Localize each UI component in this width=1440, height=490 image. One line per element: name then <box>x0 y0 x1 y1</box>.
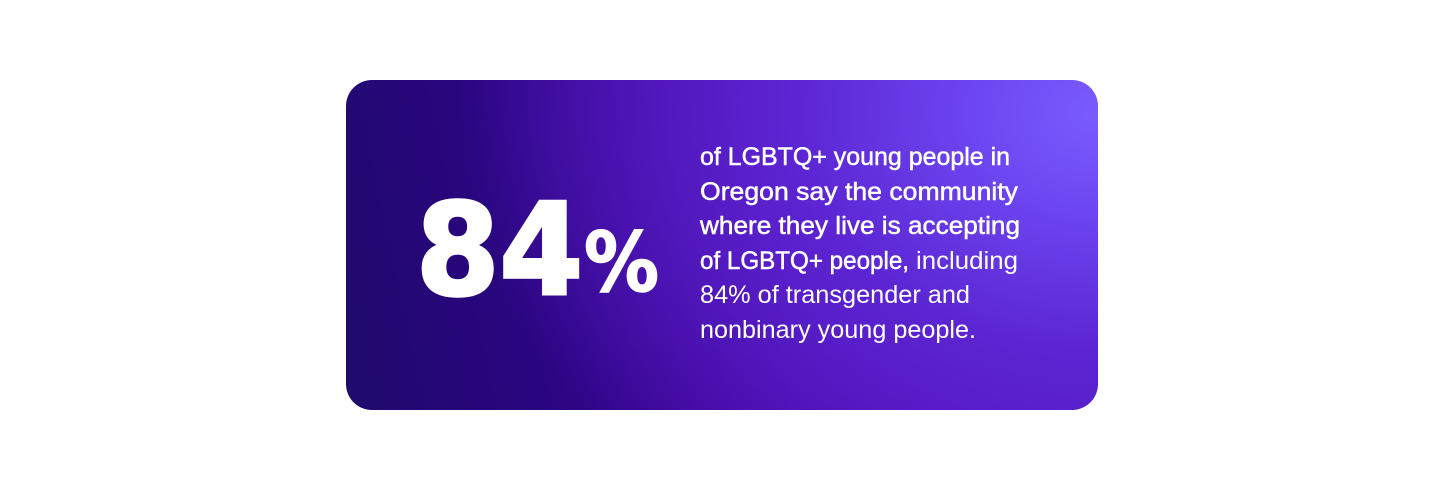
big number: 84%: 84 <box>416 176 583 324</box>
text block: description: of LGBTQ+ people, <box>700 247 909 275</box>
text block: description: Oregon say the community <box>700 178 1019 206</box>
text block: description <box>699 143 1020 344</box>
big number: 84%: % <box>584 216 659 311</box>
panel: statistic card <box>346 80 1098 410</box>
text block: description: nonbinary young people. <box>700 316 976 344</box>
text block: description: 84% of transgender and <box>700 281 970 309</box>
text block: description: where they live is accepting <box>699 212 1020 240</box>
text block: description: of LGBTQ+ young people in <box>700 143 1010 171</box>
text block: description: including <box>916 247 1018 275</box>
